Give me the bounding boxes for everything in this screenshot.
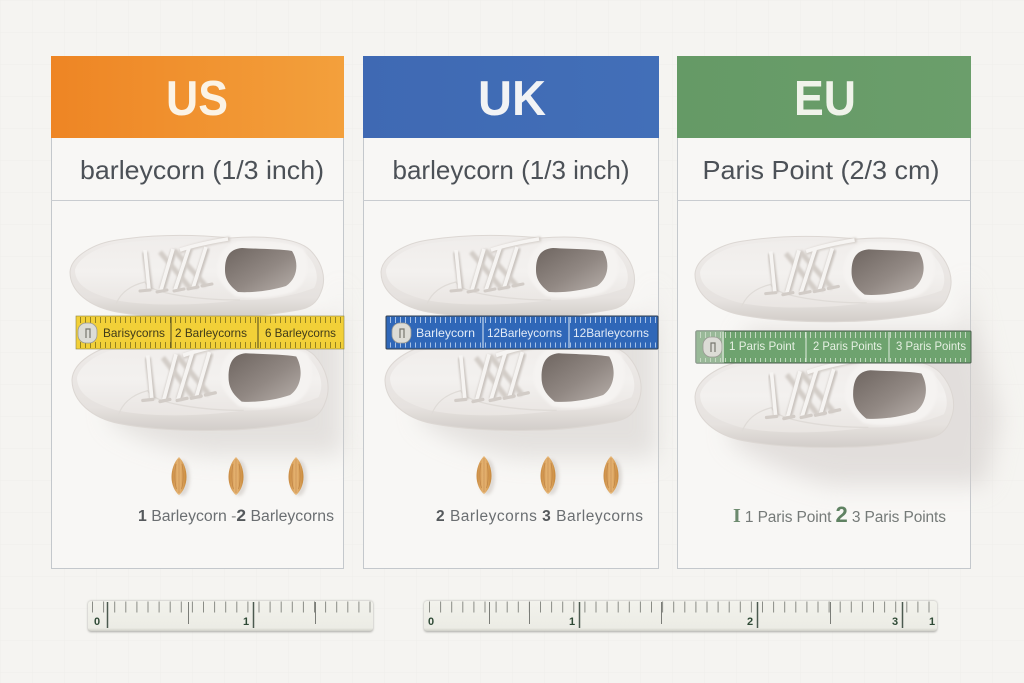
shadow: EU shoes <box>730 275 1000 485</box>
ruler: long: 1 <box>929 616 935 628</box>
icon: US top shoe <box>70 236 324 318</box>
tape measure: EU: 3 Paris Points <box>896 339 966 353</box>
header: EU <box>677 56 971 138</box>
panel body <box>52 56 344 568</box>
subheading: US unit: barleycorn (1/3 inch) <box>80 155 324 185</box>
header: UK <box>363 56 659 138</box>
ruler: long: 0 <box>428 616 434 628</box>
icon: barleycorn grains UK <box>476 456 622 495</box>
tape measure: EU <box>696 331 971 363</box>
shadow: US shoes <box>110 280 343 455</box>
icon: EU bottom shoe <box>695 356 954 447</box>
subheading: UK unit: barleycorn (1/3 inch) <box>392 155 630 185</box>
panel: UK <box>363 56 659 568</box>
ruler: short: 1 <box>243 616 249 628</box>
panel body <box>678 56 970 568</box>
ruler: long <box>424 601 937 632</box>
icon: UK bottom shoe <box>385 339 641 430</box>
icon: US bottom shoe <box>72 339 328 430</box>
panel body <box>364 56 658 568</box>
icon: barleycorn grains US <box>172 457 307 496</box>
header: US: US <box>166 72 228 126</box>
tape measure: US: 2 Barleycorns <box>175 326 247 340</box>
tape measure: US: Barisycorns <box>103 326 165 340</box>
caption: US barleycorns: 1 Barleycorn -2 Barleycorns <box>138 506 334 525</box>
ruler: long: 1 <box>569 616 575 628</box>
tape measure: EU: 1 Paris Point <box>729 339 796 353</box>
caption: UK barleycorns: 2 Barleycorns 3 Barleycorns <box>436 508 643 525</box>
ruler: long: 3 <box>892 616 898 628</box>
tape measure: UK <box>386 316 658 349</box>
tape measure: UK: Barleycorn <box>416 326 475 340</box>
ruler: short: 0 <box>94 616 100 628</box>
ruler: short <box>88 601 373 632</box>
shadow: UK shoes <box>420 280 657 458</box>
header: US <box>51 56 344 138</box>
panel: EU <box>677 56 1000 568</box>
panel: US <box>51 56 344 568</box>
caption: EU Paris points: I 1 Paris Point 2 3 Paris Points <box>733 502 946 527</box>
ruler: long: 2 <box>747 616 753 628</box>
icon: UK top shoe <box>381 236 635 318</box>
tape measure: UK: 12Barleycorns <box>487 326 562 340</box>
header: UK: UK <box>478 72 546 126</box>
tape measure: US <box>76 316 344 349</box>
tape measure: US: 6 Barleycorns <box>265 326 336 340</box>
icon: EU top shoe <box>695 237 951 322</box>
header: EU: EU <box>794 72 856 126</box>
subheading: EU unit: Paris Point (2/3 cm) <box>702 155 940 185</box>
tape measure: UK: 12Barleycorns <box>573 326 649 340</box>
tape measure: EU: 2 Paris Points <box>813 339 882 353</box>
